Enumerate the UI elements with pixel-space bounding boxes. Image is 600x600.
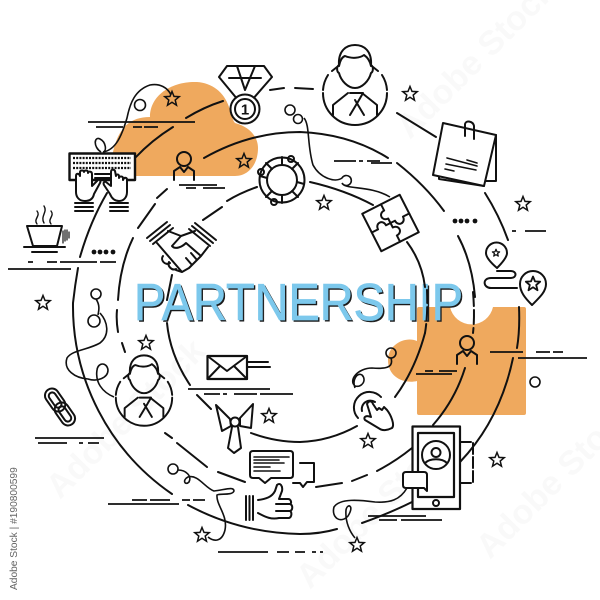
title: PARTNERSHIP [136, 276, 464, 334]
icon: businessman lower [116, 355, 172, 426]
icon: life buoy [258, 156, 304, 205]
watermark: Adobe Stock [39, 332, 213, 506]
icon: chain link [42, 386, 78, 428]
icon: coffee cup [24, 206, 69, 252]
icon: businessman top [323, 45, 387, 125]
icon: jigsaw square [362, 195, 419, 251]
orange puzzle piece [388, 307, 526, 415]
icon: thumbs up [246, 484, 292, 520]
horizontal accent lines [8, 122, 587, 552]
icon: envelope [208, 356, 270, 379]
small ring marker [530, 377, 540, 387]
dotted accents [92, 219, 477, 254]
stars [36, 86, 530, 551]
icon: medal: 1 [241, 102, 249, 118]
stock id side text: Adobe Stock | #190800599 [9, 467, 20, 590]
icon: handshake [147, 222, 216, 272]
icon: sticky note with clip [433, 122, 496, 186]
concentric dashed rings [73, 88, 519, 534]
orange cloud [113, 82, 258, 176]
icon: map pins with route [485, 242, 546, 305]
icon: clicking hand [354, 392, 393, 430]
watermark: Adobe Stock [289, 422, 463, 596]
icon: medal [219, 66, 272, 124]
icon: smartphone [403, 426, 473, 509]
title: PARTNERSHIP [134, 274, 463, 332]
icon: keyboard with hands [70, 154, 135, 211]
icon: cloud person [174, 152, 194, 180]
icon: chat bubbles [250, 451, 314, 487]
icon: necktie [216, 404, 253, 453]
icon: puzzle person [457, 336, 477, 364]
squiggle connectors [66, 85, 407, 540]
